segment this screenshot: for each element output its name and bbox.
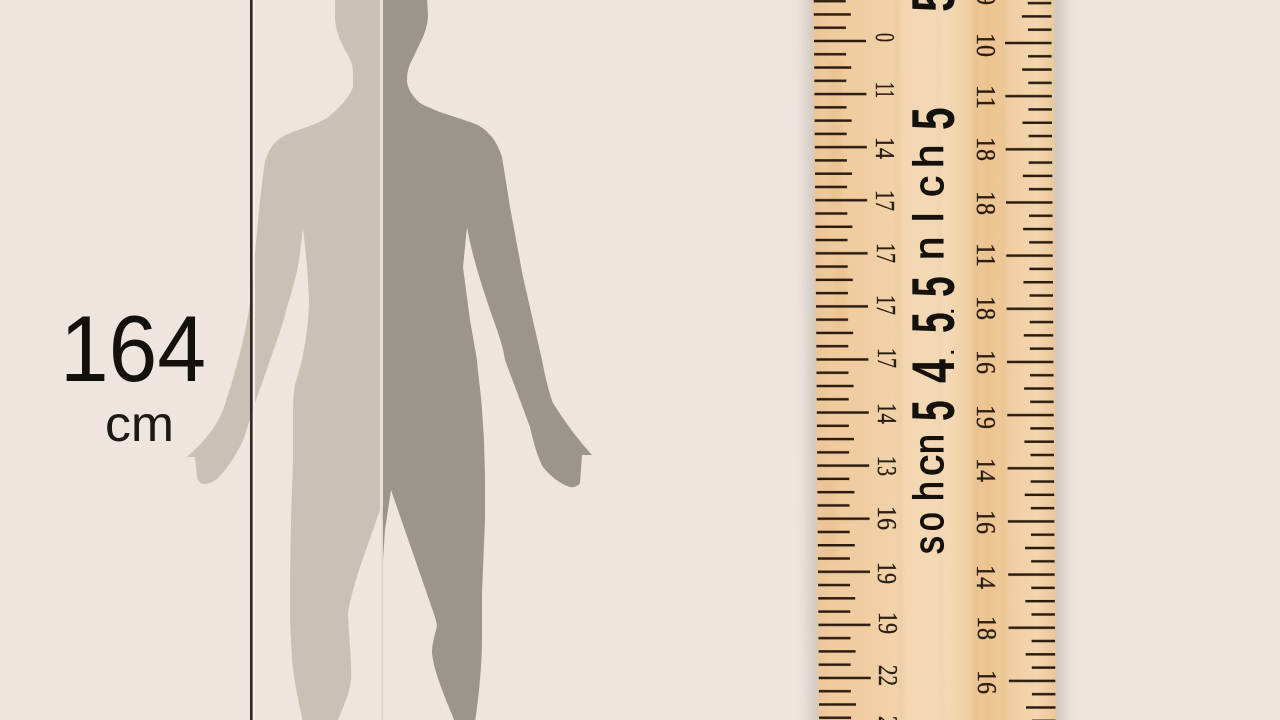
left scale numbers: 13 (872, 456, 902, 476)
ruler centre lettering: o (907, 512, 953, 531)
ruler centre lettering: n (906, 434, 953, 454)
centre dividing line (380, 0, 382, 505)
height label: 164 cm (60, 296, 206, 452)
ruler shadow (806, 0, 1064, 720)
silhouette: light left half (187, 0, 380, 720)
ruler centre lettering: 5 (900, 107, 967, 130)
right scale numbers: 11 (971, 85, 1001, 109)
wooden ruler (800, 0, 1064, 720)
right scale numbers: 16 (971, 510, 1001, 534)
right scale numbers: 11 (971, 243, 1001, 267)
ruler centre lettering: s (906, 536, 953, 554)
height silhouette figure (187, 0, 592, 720)
ruler centre lettering: n (905, 237, 952, 260)
left scale numbers: 16 (872, 506, 902, 530)
ruler centre lettering: c (905, 455, 952, 476)
left scale numbers: 17 (872, 348, 902, 368)
left scale numbers: 22 (873, 665, 903, 686)
ruler centre lettering: c (905, 176, 952, 197)
right scale numbers: 18 (972, 616, 1002, 640)
ruler centre lettering: 5 (900, 312, 967, 333)
left scale numbers: 17 (870, 190, 900, 211)
right scale numbers: 10 (971, 33, 1001, 57)
left scale numbers: 14 (870, 137, 900, 159)
right scale numbers: 16 (971, 350, 1001, 374)
ruler body (813, 0, 1056, 720)
ruler centre lettering (900, 0, 968, 554)
left scale numbers (870, 33, 903, 720)
left scale numbers: 0 (870, 33, 900, 42)
left tick marks (800, 0, 900, 720)
silhouette: dark right half (383, 0, 592, 720)
left scale numbers: 14 (872, 403, 902, 424)
ruler centre lettering: . (937, 349, 959, 355)
right scale numbers: 18 (971, 191, 1001, 215)
right scale numbers: 18 (971, 137, 1001, 161)
ruler centre lettering: h (905, 145, 952, 168)
ruler centre lettering: 5 (900, 400, 967, 421)
ruler centre lettering: 5 (900, 276, 967, 297)
right scale numbers: 18 (971, 296, 1001, 320)
ruler centre lettering: 4 (901, 359, 968, 383)
right scale numbers: 19 (971, 405, 1001, 429)
right scale numbers: 14 (971, 458, 1001, 482)
right scale numbers (971, 0, 1002, 694)
right tick marks (1000, 0, 1060, 720)
vertical height line (250, 0, 255, 720)
right scale numbers: 14 (971, 565, 1001, 589)
wood grain (830, 0, 1004, 720)
left scale numbers: 17 (871, 295, 901, 315)
ruler centre lettering: . (937, 308, 959, 314)
ruler centre lettering: h (906, 481, 953, 501)
left scale numbers: 19 (873, 612, 903, 634)
height label: 164 cm: cm (105, 396, 174, 452)
height label: 164 cm: 164 (60, 296, 206, 401)
left scale numbers: 19 (872, 562, 902, 584)
right scale numbers: 16 (972, 670, 1002, 694)
left scale numbers: 11 (870, 82, 900, 98)
ruler centre lettering: l (905, 213, 952, 222)
left scale numbers: 17 (871, 243, 901, 263)
